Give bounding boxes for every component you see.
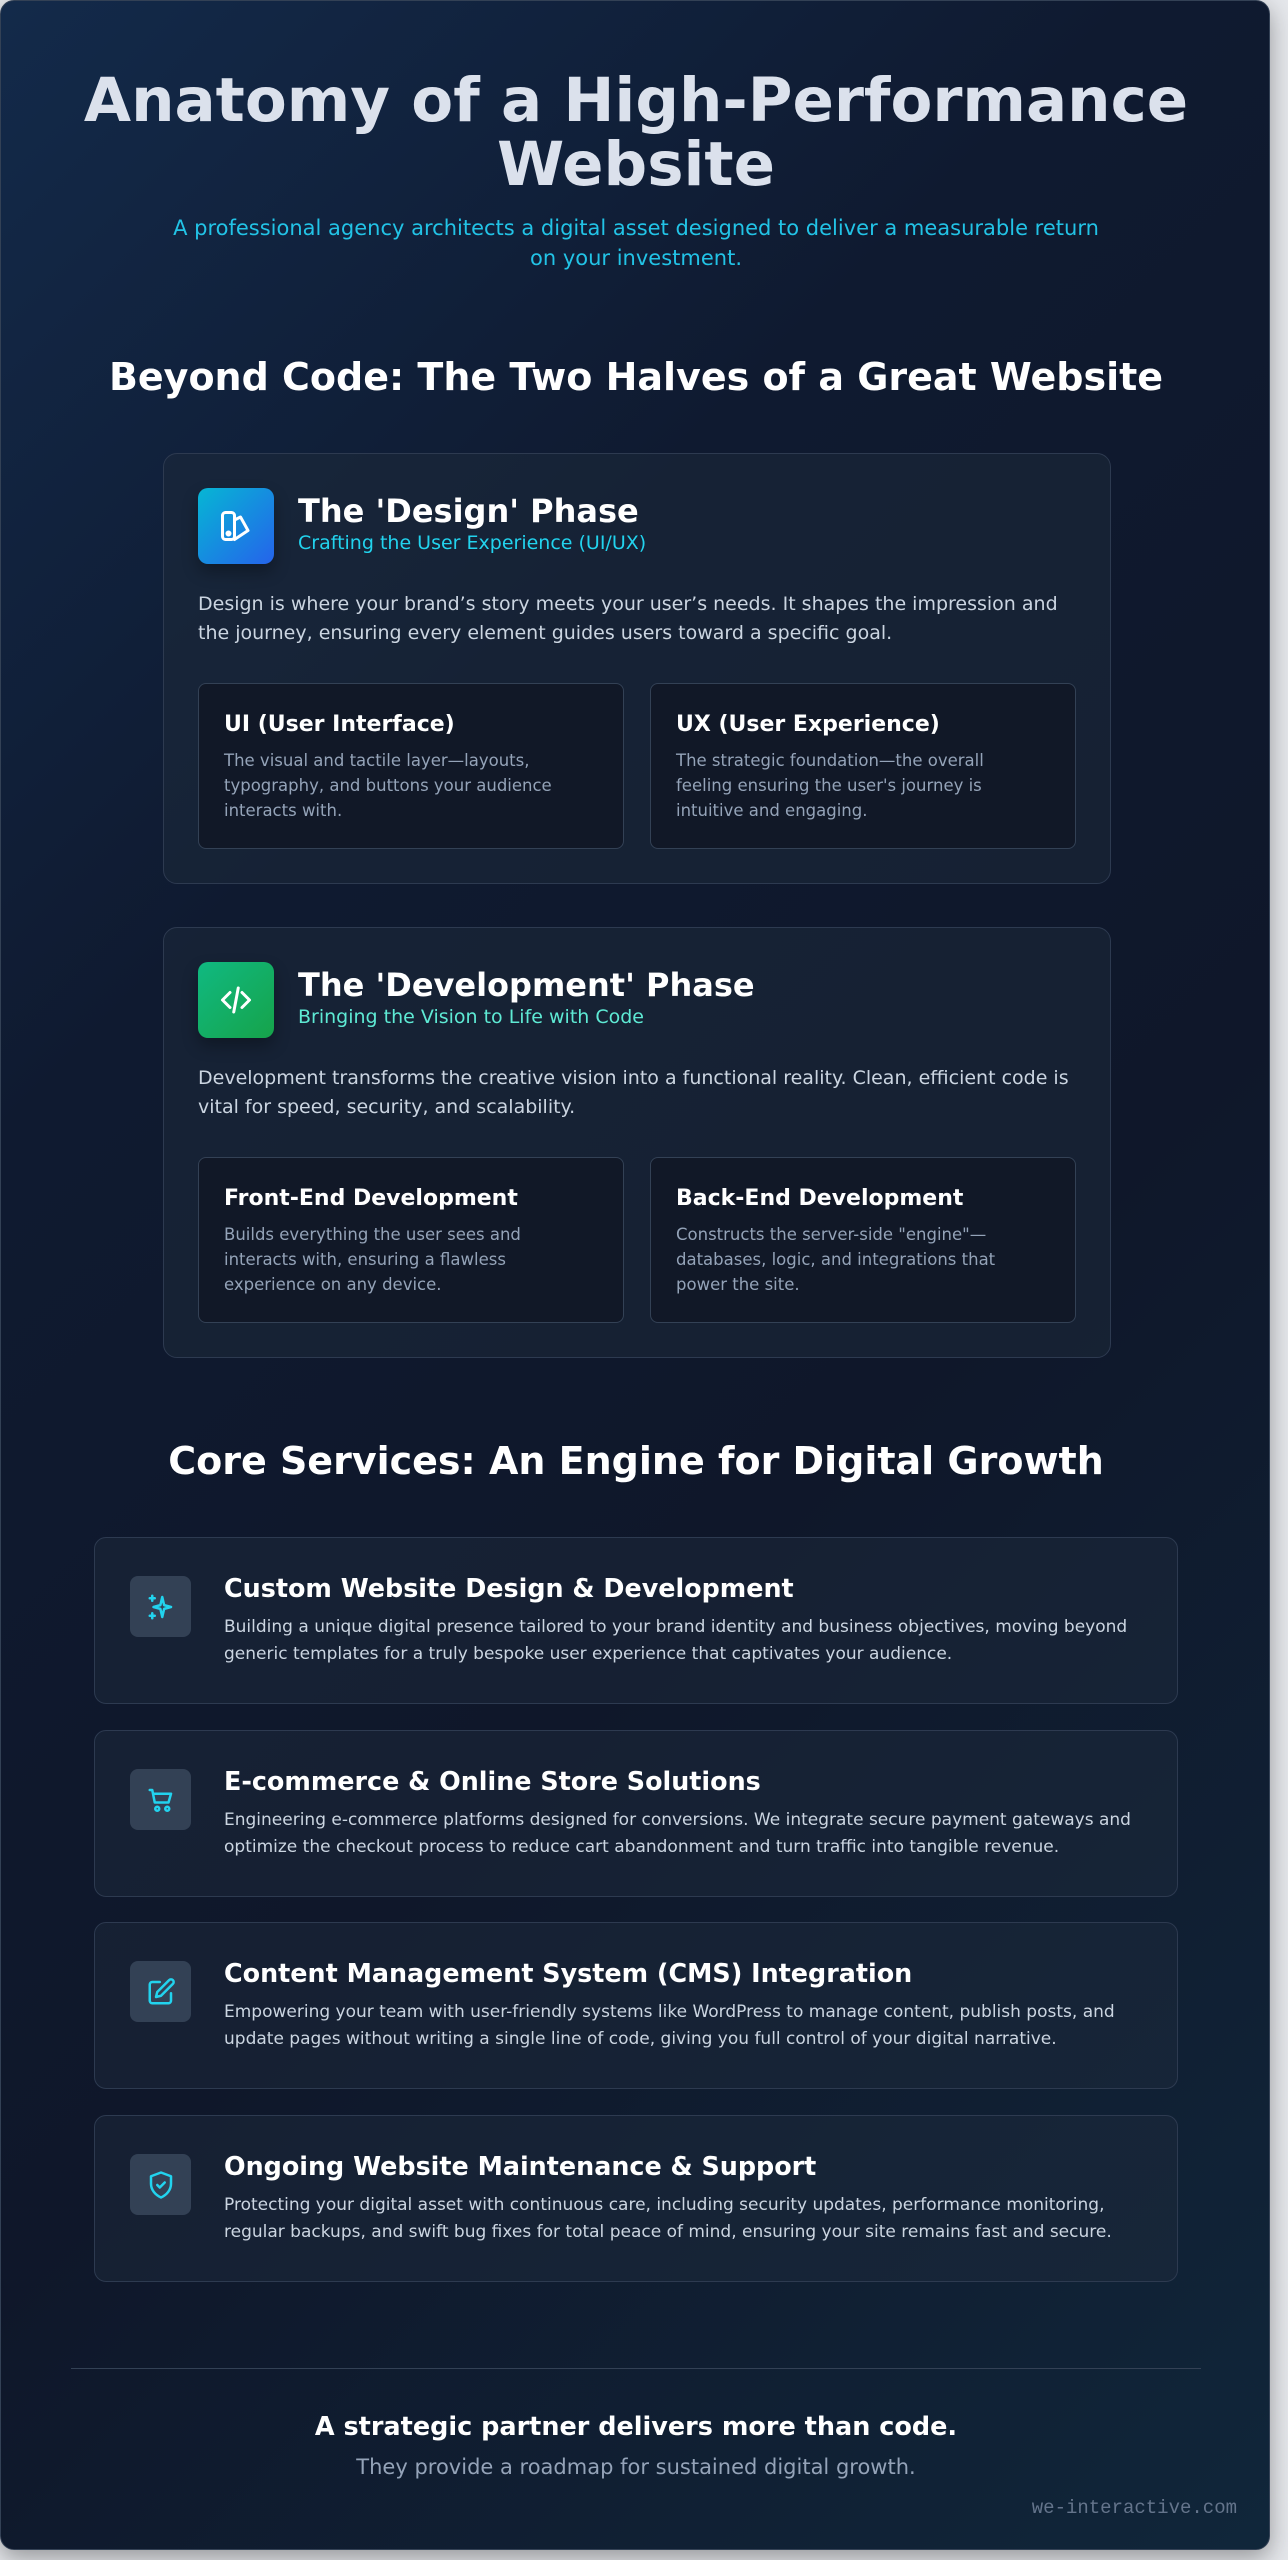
subcard: UI: The visual and tactile layer—layouts, typography, and buttons your audience interacts with. (224, 751, 552, 820)
service: CMS: Content Management System (CMS) Integration (224, 1958, 912, 1988)
subtitle: A professional agency architects a digital asset designed to deliver a measurable return on your investment. (173, 216, 1099, 270)
heading: core services: Core Services: An Engine for Digital Growth (168, 1439, 1104, 1483)
phase title: The 'Design' Phase (298, 492, 639, 530)
subcard: UX: UX (User Experience) (676, 712, 940, 737)
service: maintenance: Protecting your digital asset with continuous care, including security updates, performance monitoring, regular backups, and swift bug fixes for total peace of mind, ensuring your site remains fast and secure. (224, 2195, 1112, 2242)
title (84, 65, 1188, 200)
phase subtitle: Bringing the Vision to Life with Code (298, 1006, 644, 1028)
footer statement: A strategic partner delivers more than code. (315, 2412, 957, 2442)
service: maintenance (94, 2115, 1178, 2282)
title: Anatomy of a High-Performance (84, 65, 1188, 136)
phase description: Design is where your brand’s story meets your user’s needs. It shapes the impression and the journey, ensuring every element guides users toward a specific goal. (198, 593, 1058, 644)
service: custom design: Custom Website Design & Development (224, 1573, 794, 1603)
panel: design phase (163, 453, 1111, 884)
service: custom design (94, 1537, 1178, 1704)
service: e-commerce (94, 1730, 1178, 1897)
subcard: back-end (650, 1157, 1076, 1323)
title: Website (497, 129, 775, 200)
subcard: UX: The strategic foundation—the overall feeling ensuring the user's journey is intuitive and engaging. (676, 751, 984, 820)
service: custom design: Building a unique digital presence tailored to your brand identity and business objectives, moving beyond generic templates for a truly bespoke user experience that captivates your audience. (224, 1617, 1127, 1664)
subcard: back-end: Back-End Development (676, 1186, 963, 1211)
subcard: UI (198, 683, 624, 849)
footer subtext: They provide a roadmap for sustained digital growth. (356, 2455, 916, 2479)
service: CMS: Empowering your team with user-friendly systems like WordPress to manage content, publish posts, and update pages without writing a single line of code, giving you full control of your digital narrative. (224, 2002, 1115, 2049)
subcard: UX (650, 683, 1076, 849)
subcard: UI: UI (User Interface) (224, 712, 455, 737)
service: maintenance: Ongoing Website Maintenance & Support (224, 2151, 816, 2181)
subcard: front-end: Builds everything the user sees and interacts with, ensuring a flawless experience on any device. (224, 1225, 521, 1294)
icon: code (198, 962, 274, 1038)
heading: two halves: Beyond Code: The Two Halves of a Great Website (109, 355, 1163, 399)
service: CMS (94, 1922, 1178, 2089)
watermark: we-interactive.com (1032, 2497, 1237, 2519)
icon: sparkles (130, 1576, 191, 1637)
service: e-commerce: Engineering e-commerce platforms designed for conversions. We integrate secure payment gateways and optimize the checkout process to reduce cart abandonment and turn traffic into tangible revenue. (224, 1810, 1131, 1857)
subcard: back-end: Constructs the server-side "engine"—databases, logic, and integrations that power the site. (676, 1225, 995, 1294)
icon: edit (130, 1961, 191, 2022)
phase subtitle: Crafting the User Experience (UI/UX) (298, 532, 646, 554)
phase title: The 'Development' Phase (298, 966, 755, 1004)
service: e-commerce: E-commerce & Online Store Solutions (224, 1766, 761, 1796)
panel: development phase (163, 927, 1111, 1358)
subcard: front-end: Front-End Development (224, 1186, 518, 1211)
phase description: Development transforms the creative vision into a functional reality. Clean, efficient code is vital for speed, security, and scalability. (198, 1067, 1069, 1118)
icon: cart (130, 1769, 191, 1830)
subcard: front-end (198, 1157, 624, 1323)
icon: design (198, 488, 274, 564)
icon: shield (130, 2154, 191, 2215)
